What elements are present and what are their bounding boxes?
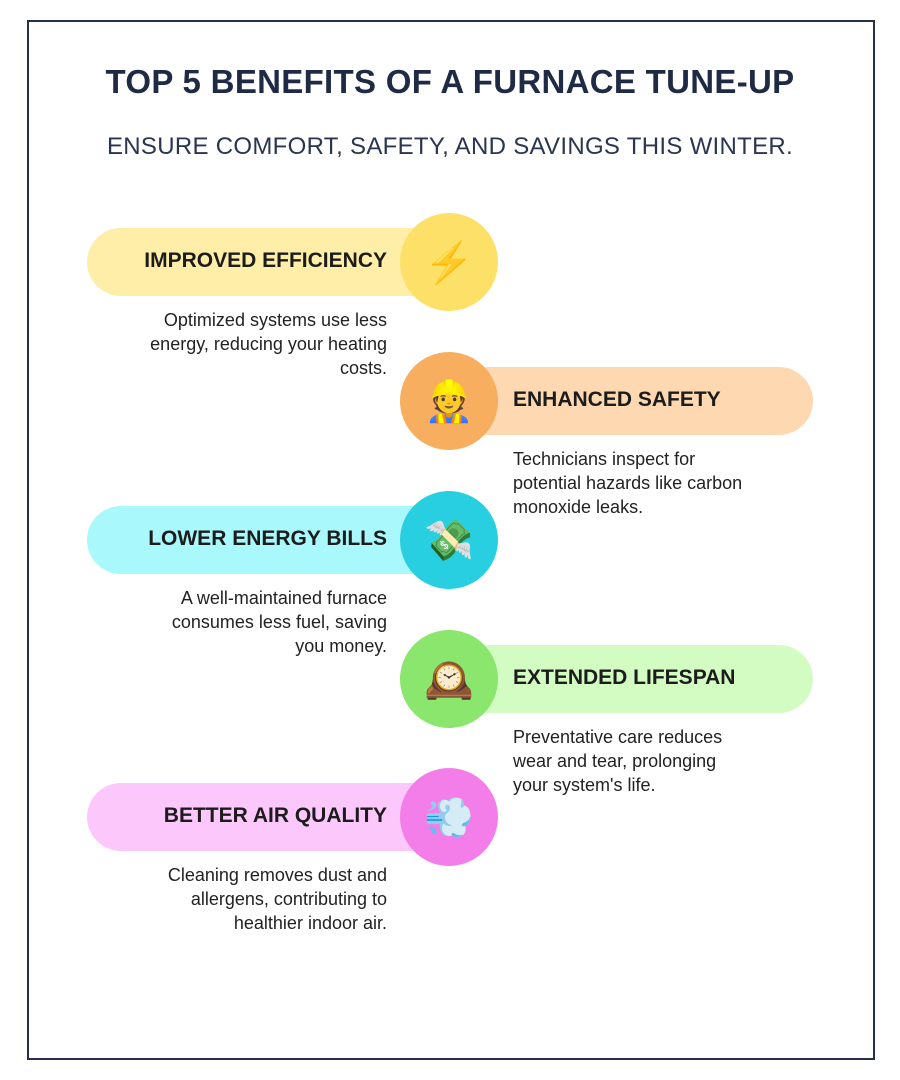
item: enhanced safety (400, 352, 813, 517)
description: Technicians inspect for potential hazards like carbon monoxide leaks. (513, 449, 742, 517)
icon: clock: 🕰️ (424, 658, 474, 702)
item: improved efficiency (87, 213, 498, 378)
label: LOWER ENERGY BILLS (148, 527, 387, 550)
pill (87, 228, 487, 296)
icon: wind (400, 768, 498, 866)
label: ENHANCED SAFETY (513, 388, 721, 411)
description: Cleaning removes dust and allergens, contributing to healthier indoor air. (168, 865, 387, 933)
icon: money: 💸 (424, 518, 474, 562)
description: A well-maintained furnace consumes less fuel, saving you money. (172, 588, 387, 656)
label: EXTENDED LIFESPAN (513, 666, 735, 689)
pill (449, 367, 813, 435)
item: extended lifespan (400, 630, 813, 795)
icon: lightning: ⚡ (424, 240, 474, 284)
item: lower energy bills (87, 491, 498, 656)
icon: clock (400, 630, 498, 728)
description: Optimized systems use less energy, reducing your heating costs. (150, 310, 387, 378)
label: IMPROVED EFFICIENCY (144, 249, 387, 272)
subtitle: ENSURE COMFORT, SAFETY, AND SAVINGS THIS WINTER. (107, 133, 793, 160)
icon: wind: 💨 (424, 796, 474, 840)
icon: lightning (400, 213, 498, 311)
icon: worker: 👷 (424, 380, 474, 424)
description: Preventative care reduces wear and tear, prolonging your system's life. (513, 727, 722, 795)
icon: money (400, 491, 498, 589)
label: BETTER AIR QUALITY (164, 804, 387, 827)
item: better air quality (87, 768, 498, 933)
pill (87, 783, 487, 851)
pill (449, 645, 813, 713)
pill (87, 506, 487, 574)
icon: worker (400, 352, 498, 450)
title: TOP 5 BENEFITS OF A FURNACE TUNE-UP (106, 63, 794, 100)
